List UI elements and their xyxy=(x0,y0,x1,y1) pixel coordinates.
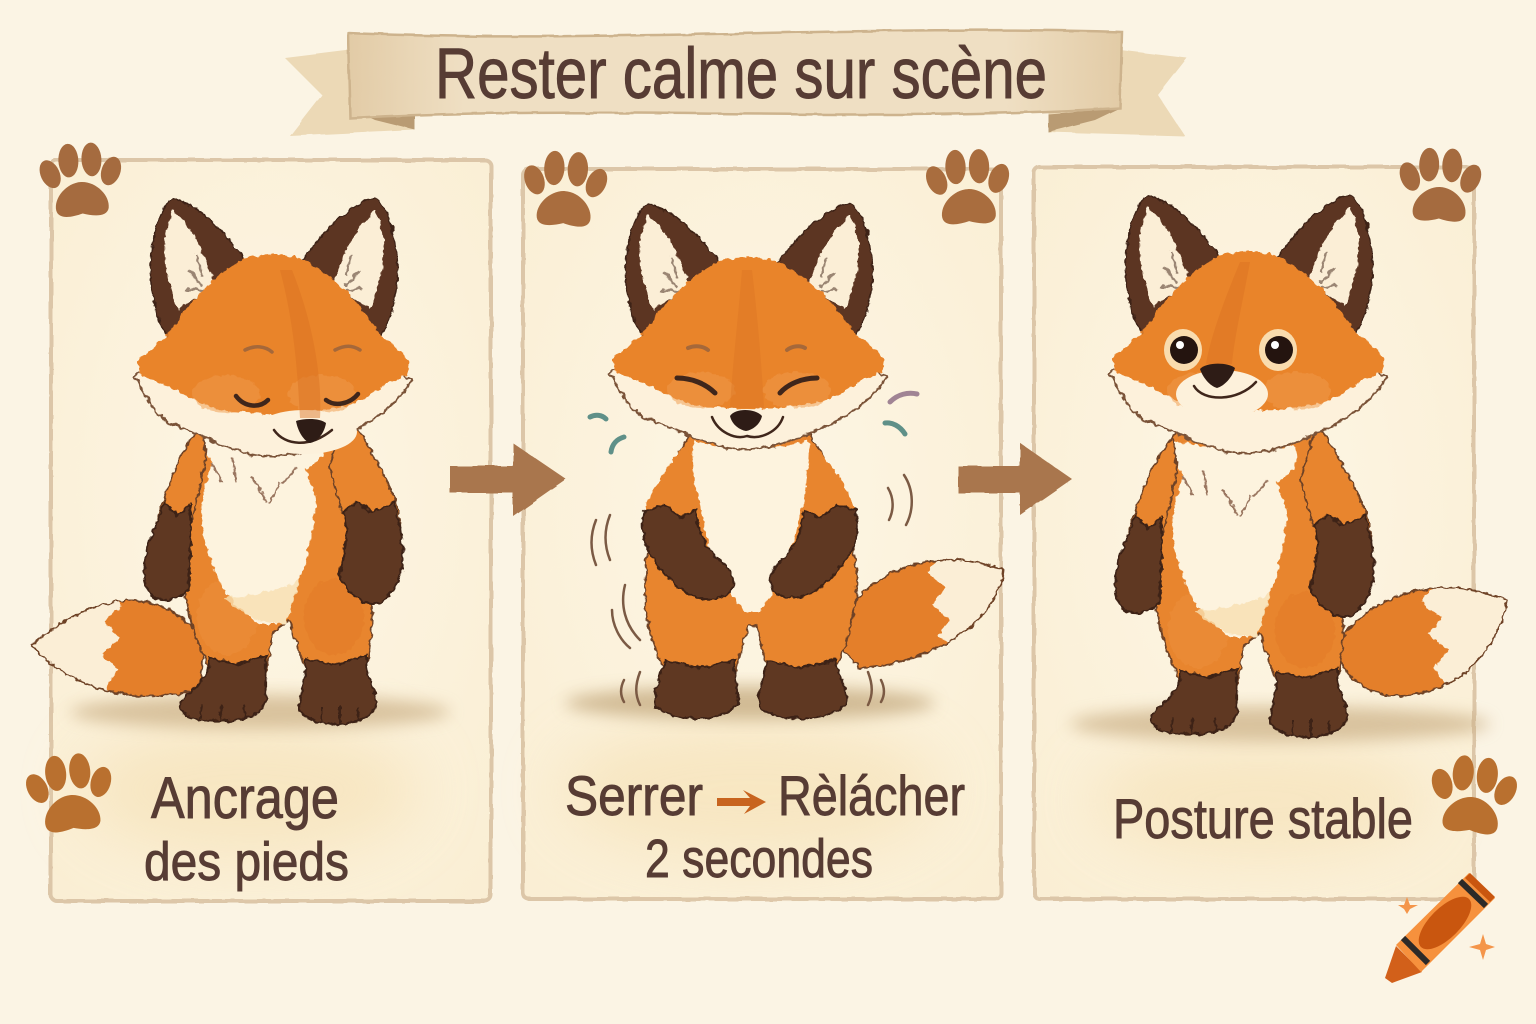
head xyxy=(1110,196,1387,454)
paw top right panel 2 xyxy=(921,148,1015,225)
muzzle xyxy=(1176,370,1268,418)
muzzle xyxy=(705,409,789,441)
caption 2 second part: Rèlácher xyxy=(778,764,965,827)
tail xyxy=(1335,588,1507,696)
title text: Rester calme sur scène xyxy=(435,35,1047,114)
crayon barrel xyxy=(1396,873,1495,972)
paw bottom left xyxy=(19,750,120,836)
banner ribbon xyxy=(348,30,1122,118)
motion lines xyxy=(592,475,912,705)
nose xyxy=(730,410,762,431)
crayon cap xyxy=(1465,873,1495,902)
paw top right panel 3 xyxy=(1394,147,1486,223)
body xyxy=(1115,423,1374,737)
body xyxy=(144,410,403,724)
panel 3: stable posture xyxy=(1034,167,1507,899)
caption 1 second line: des pieds xyxy=(144,832,349,892)
arrow 2 xyxy=(958,443,1072,515)
crayon oval xyxy=(1410,888,1480,958)
small orange arrow xyxy=(717,790,766,814)
panel 1: foot anchoring xyxy=(32,160,491,901)
paw top left panel 2 xyxy=(518,149,613,228)
crayon bands xyxy=(1403,881,1486,963)
nose bridge xyxy=(1206,262,1250,364)
paw top left panel 1 xyxy=(34,141,127,219)
panel 1 card xyxy=(51,160,491,901)
panel 2: tense and release xyxy=(523,169,1003,899)
tail xyxy=(835,560,1003,668)
ground wash xyxy=(560,720,940,860)
panel 3 card xyxy=(1034,167,1474,899)
caption 1: Ancrage xyxy=(151,766,339,831)
sparkles xyxy=(1398,897,1495,960)
ground wash xyxy=(80,720,420,860)
tail xyxy=(32,600,205,696)
ground shadow xyxy=(565,686,935,720)
nose xyxy=(296,419,326,443)
face xyxy=(677,346,817,437)
fox 2 squeezing xyxy=(590,204,1003,719)
banner tails xyxy=(285,50,1187,136)
ground shadow xyxy=(1070,706,1490,742)
nose bridge xyxy=(280,270,320,418)
eye patches xyxy=(1164,329,1297,371)
sweat drops xyxy=(590,393,917,452)
muzzle xyxy=(253,410,357,454)
crayon tip xyxy=(1385,946,1422,983)
ground shadow xyxy=(70,695,450,729)
paw bottom right xyxy=(1423,752,1524,838)
nose and smile xyxy=(1194,364,1256,398)
eyes xyxy=(1170,336,1293,364)
arrow 1 xyxy=(450,443,566,516)
title banner xyxy=(285,30,1187,136)
nose bridge xyxy=(730,270,764,408)
caption 3: Posture stable xyxy=(1113,787,1413,850)
fox 1 eyes closed xyxy=(32,199,412,724)
head xyxy=(135,199,412,457)
caption 2 second line: 2 secondes xyxy=(645,829,873,889)
caption 2 first part: Serrer xyxy=(565,764,703,827)
ground wash xyxy=(1090,740,1430,860)
body xyxy=(642,432,858,719)
panel 2 card xyxy=(523,169,1001,899)
face xyxy=(236,346,360,443)
crayon logo xyxy=(1385,873,1495,983)
fox 3 eyes open xyxy=(1110,196,1507,737)
head xyxy=(610,204,887,450)
